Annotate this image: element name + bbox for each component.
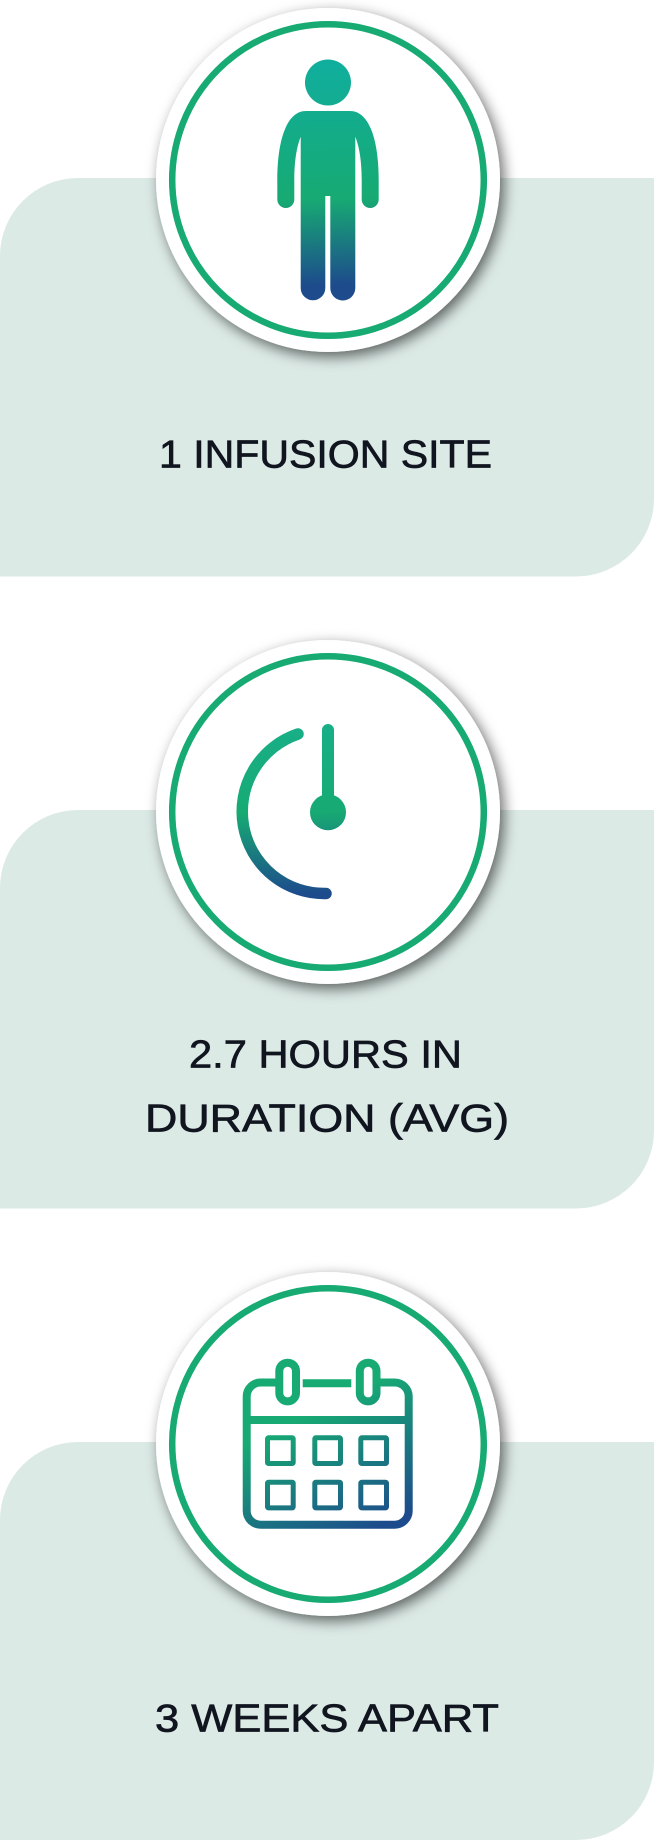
text: 2.7 hours in duration (avg): DURATION (AVG) bbox=[145, 1098, 509, 1141]
icon: person bbox=[277, 60, 379, 300]
text: 1 infusion site: 1 INFUSION SITE bbox=[159, 434, 492, 477]
badge circle: duration bbox=[156, 640, 500, 984]
panel background: infusion site bbox=[0, 178, 654, 576]
badge circle: weeks apart bbox=[156, 1272, 500, 1616]
text: 2.7 hours in duration (avg): 2.7 HOURS IN bbox=[189, 1034, 462, 1077]
icon: calendar bbox=[247, 1363, 409, 1525]
text: 3 weeks apart: 3 WEEKS APART bbox=[155, 1698, 499, 1741]
text: 2.7 hours in duration (avg) bbox=[145, 1034, 509, 1141]
panel background: weeks apart bbox=[0, 1442, 654, 1840]
badge circle: infusion site bbox=[156, 8, 500, 352]
panel background: duration bbox=[0, 810, 654, 1208]
icon: clock bbox=[242, 724, 346, 894]
panel: duration bbox=[0, 640, 654, 1208]
panel: weeks apart bbox=[0, 1272, 654, 1840]
panel: infusion site bbox=[0, 8, 654, 576]
